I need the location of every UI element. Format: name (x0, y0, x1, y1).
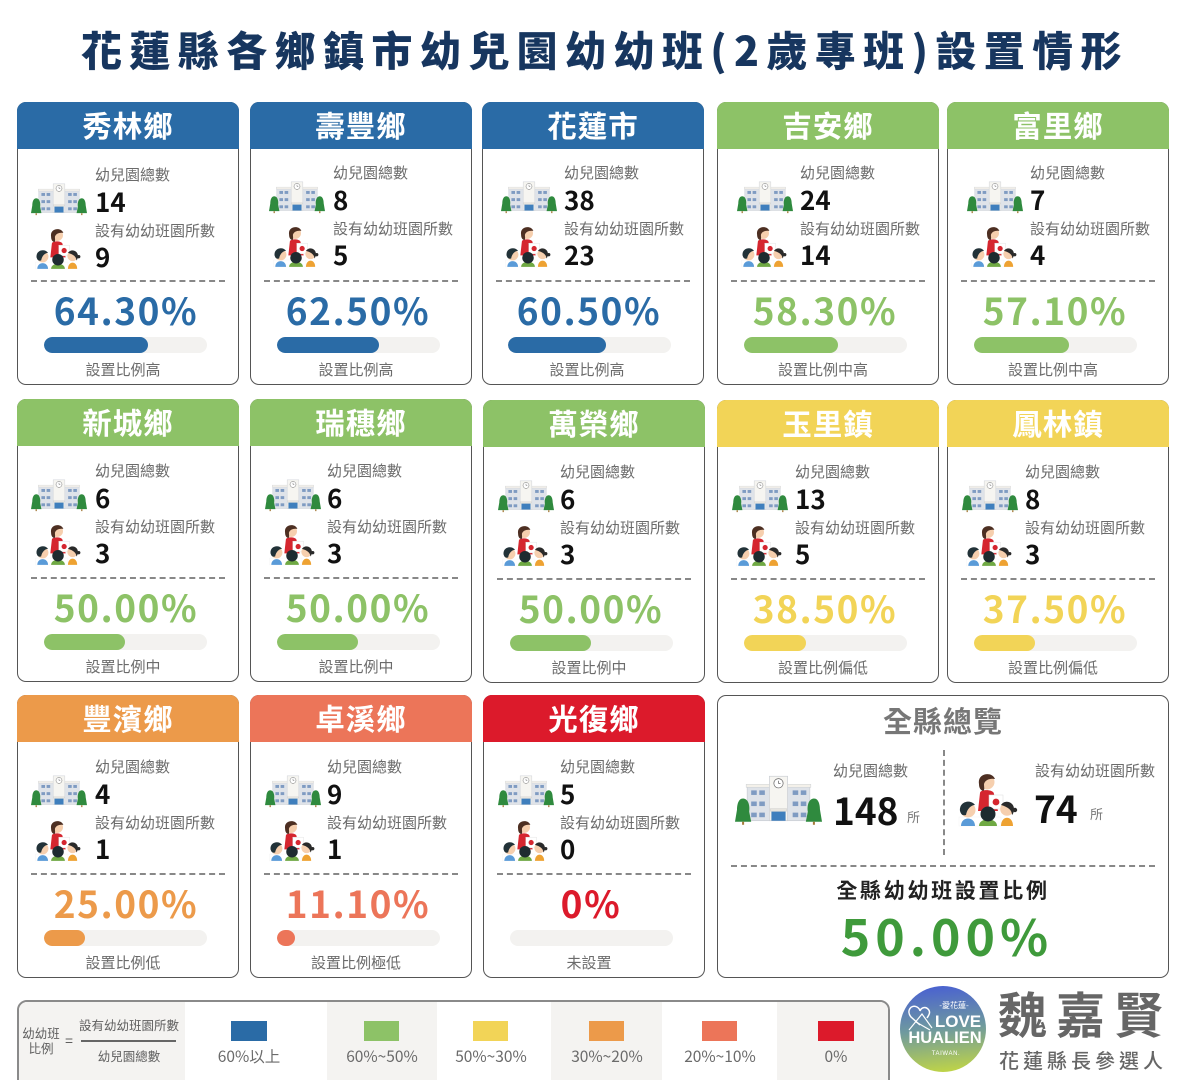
heading: 秀林鄉 (17, 102, 239, 149)
heading: 瑞穗鄉: 瑞穗鄉 (315, 401, 407, 443)
unit: 所 (1090, 804, 1103, 823)
formula: = (65, 1031, 73, 1051)
icon: teacher and children (742, 227, 786, 267)
icon: school (498, 776, 554, 808)
label: kindergarten total: 幼兒園總數 (1025, 461, 1100, 482)
label: kindergarten total: 幼兒園總數 (327, 756, 402, 777)
number: kindergarten total: 8 (1025, 480, 1040, 517)
panel: 吉安鄉 (717, 102, 939, 385)
label: with toddler class: 設有幼幼班園所數 (564, 218, 684, 239)
heading: 花蓮市: 花蓮市 (547, 104, 639, 146)
label: kindergarten total: 幼兒園總數 (95, 164, 170, 185)
label: kindergarten total: 幼兒園總數 (333, 162, 408, 183)
icon: teacher and children (736, 526, 782, 566)
formula (22, 1015, 179, 1065)
heading: county overview: 全縣總覽 (883, 699, 1003, 741)
icon: teacher and children (502, 821, 548, 861)
number: 74: 74 (1034, 780, 1078, 834)
label: with toddler class: 設有幼幼班園所數 (560, 517, 680, 538)
heading: 光復鄉: 光復鄉 (548, 697, 640, 739)
percentage: 37.50% (983, 580, 1127, 634)
logo: Love Hualien: -愛花蓮- (939, 1000, 969, 1011)
legend item: 30% to 20%: 30%~20% (571, 1045, 643, 1067)
caption: 設置比例高 (85, 359, 160, 380)
legend item: 0% (818, 1021, 854, 1067)
icon: school (737, 182, 793, 214)
legend item: 50% to 30% (455, 1021, 527, 1067)
logo: Love Hualien (900, 986, 986, 1072)
legend item: 60% to 50% (346, 1021, 418, 1067)
number: with toddler class: 3 (327, 534, 342, 571)
formula: 比例 (28, 1038, 54, 1057)
label: kindergarten total: 幼兒園總數 (800, 162, 875, 183)
logo: Love Hualien: LOVE (935, 1012, 981, 1031)
progress bar (277, 337, 440, 353)
percentage: 60.50% (517, 282, 661, 336)
label: with toddler class: 設有幼幼班園所數 (95, 516, 215, 537)
panel: 花蓮市 (482, 102, 704, 385)
caption: 設置比例中 (318, 656, 394, 677)
progress bar (510, 635, 673, 651)
icon: school (265, 776, 321, 808)
label: kindergarten total: 幼兒園總數 (560, 756, 635, 777)
progress bar (974, 337, 1137, 353)
label: with toddler class: 設有幼幼班園所數 (327, 516, 447, 537)
caption: 設置比例低 (85, 952, 160, 973)
heading: 富里鄉 (947, 102, 1169, 149)
percentage: 50.00% (519, 580, 663, 634)
icon: teacher and children (270, 821, 314, 861)
percentage: county ratio: 50.00% (841, 899, 1053, 971)
progress bar (974, 635, 1137, 651)
number: kindergarten total: 24 (800, 181, 831, 218)
label: with toddler class: 設有幼幼班園所數 (1035, 760, 1155, 781)
legend item: 20% to 10%: 20%~10% (684, 1045, 756, 1067)
number: kindergarten total: 9 (327, 775, 342, 812)
icon: teacher and children (966, 526, 1012, 566)
label: with toddler class: 設有幼幼班園所數 (800, 218, 920, 239)
number: with toddler class: 3 (560, 535, 575, 572)
label: kindergarten total: 幼兒園總數 (560, 461, 635, 482)
heading: 富里鄉: 富里鄉 (1012, 104, 1104, 146)
icon: school (501, 182, 557, 214)
heading: 光復鄉 (483, 695, 705, 742)
progress bar (44, 930, 207, 946)
progress bar (277, 930, 440, 946)
candidate name: 魏嘉賢 (998, 977, 1172, 1048)
caption: 設置比例高 (318, 359, 394, 380)
label: kindergarten total: 幼兒園總數 (95, 460, 170, 481)
formula: 幼兒園總數 (98, 1046, 160, 1065)
icon: school (31, 184, 87, 216)
panel: 瑞穗鄉 (250, 399, 472, 682)
panel: 鳳林鎮 (947, 400, 1169, 683)
number: kindergarten total: 13 (795, 480, 826, 517)
icon: school (732, 480, 788, 512)
progress bar (277, 634, 440, 650)
heading: 豐濱鄉 (17, 695, 239, 742)
caption: 設置比例偏低 (1008, 657, 1098, 678)
icon: teacher and children (36, 229, 80, 269)
formula: 幼幼班 (22, 1023, 60, 1042)
heading: 卓溪鄉: 卓溪鄉 (315, 697, 407, 739)
number: kindergarten total: 14 (95, 183, 126, 220)
number: kindergarten total: 7 (1030, 181, 1045, 218)
percentage: 50.00% (286, 579, 430, 633)
caption: 未設置 (566, 952, 612, 973)
percentage: 38.50% (753, 580, 897, 634)
legend item: 60% or more: 60%以上 (218, 1045, 280, 1067)
icon: school (265, 480, 321, 512)
title: 花蓮縣各鄉鎮市幼兒園幼幼班(2歲專班)設置情形 (81, 18, 1129, 78)
label: with toddler class: 設有幼幼班園所數 (327, 812, 447, 833)
heading: 壽豐鄉: 壽豐鄉 (315, 104, 407, 146)
formula: 設有幼幼班園所數 (79, 1015, 179, 1034)
number: kindergarten total: 5 (560, 775, 575, 812)
icon: teacher and children (959, 774, 1018, 826)
number: with toddler class: 4 (1030, 236, 1045, 273)
heading: 玉里鎮: 玉里鎮 (782, 402, 874, 444)
heading: 花蓮市 (482, 102, 704, 149)
percentage: 0% (561, 875, 621, 929)
panel: 卓溪鄉 (250, 695, 472, 978)
percentage: 62.50% (286, 282, 430, 336)
label: with toddler class: 設有幼幼班園所數 (1030, 218, 1150, 239)
panel: county overview (717, 695, 1169, 978)
number: kindergarten total: 6 (95, 479, 110, 516)
candidate title: 花蓮縣長參選人 (999, 1045, 1167, 1074)
number: with toddler class: 1 (327, 830, 342, 867)
caption: 設置比例中高 (1008, 359, 1098, 380)
number: kindergarten total: 4 (95, 775, 110, 812)
icon: school (269, 182, 325, 214)
number: 148: 148 (833, 782, 898, 836)
label: kindergarten total: 幼兒園總數 (327, 460, 402, 481)
legend (17, 1000, 890, 1080)
label: kindergarten total: 幼兒園總數 (564, 162, 639, 183)
caption: 設置比例極低 (311, 952, 401, 973)
number: with toddler class: 5 (795, 535, 810, 572)
heading: 吉安鄉 (717, 102, 939, 149)
icon: school (31, 776, 87, 808)
progress bar (44, 337, 207, 353)
progress bar (44, 634, 207, 650)
number: kindergarten total: 38 (564, 181, 595, 218)
percentage: 58.30% (753, 282, 897, 336)
number: kindergarten total: 6 (327, 479, 342, 516)
icon: teacher and children (36, 821, 80, 861)
caption: 設置比例中高 (778, 359, 868, 380)
heading: 新城鄉 (17, 399, 239, 446)
legend item: 20% to 10% (684, 1021, 756, 1067)
number: with toddler class: 23 (564, 236, 595, 273)
panel: 秀林鄉 (17, 102, 239, 385)
legend item: 30% to 20% (571, 1021, 643, 1067)
percentage: 11.10% (286, 875, 430, 929)
icon: teacher and children (972, 227, 1016, 267)
icon: school (31, 480, 87, 512)
number: with toddler class: 0 (560, 830, 575, 867)
heading: 鳳林鎮: 鳳林鎮 (1012, 402, 1104, 444)
progress bar (510, 930, 673, 946)
heading: 萬榮鄉: 萬榮鄉 (548, 402, 640, 444)
heading: 玉里鎮 (717, 400, 939, 447)
label: kindergarten total: 幼兒園總數 (833, 760, 908, 781)
legend item: 60% or more (218, 1021, 280, 1067)
heading: 新城鄉: 新城鄉 (82, 401, 174, 443)
percentage: 50.00% (54, 579, 198, 633)
heading: 卓溪鄉 (250, 695, 472, 742)
panel: 新城鄉 (17, 399, 239, 682)
icon: school (498, 480, 554, 512)
panel: 豐濱鄉 (17, 695, 239, 978)
icon: teacher and children (270, 525, 314, 565)
label: with toddler class: 設有幼幼班園所數 (95, 812, 215, 833)
icon: school (962, 480, 1018, 512)
percentage: 57.10% (983, 282, 1127, 336)
icon: teacher and children (506, 227, 550, 267)
panel: 萬榮鄉 (483, 400, 705, 683)
unit: 所 (907, 807, 920, 826)
label: kindergarten total: 幼兒園總數 (1030, 162, 1105, 183)
progress bar (744, 337, 907, 353)
label: with toddler class: 設有幼幼班園所數 (1025, 517, 1145, 538)
caption: 設置比例中 (551, 657, 626, 678)
logo: Love Hualien: HUALIEN (908, 1029, 982, 1047)
label: kindergarten total: 幼兒園總數 (95, 756, 170, 777)
progress bar (744, 635, 907, 651)
progress bar (508, 337, 671, 353)
number: with toddler class: 9 (95, 238, 110, 275)
heading: 瑞穗鄉 (250, 399, 472, 446)
legend item: 50% to 30%: 50%~30% (455, 1045, 527, 1067)
label: kindergarten total: 幼兒園總數 (795, 461, 870, 482)
heading: 壽豐鄉 (250, 102, 472, 149)
number: kindergarten total: 8 (333, 181, 348, 218)
percentage: 25.00% (54, 875, 198, 929)
heading: county ratio: 全縣幼幼班設置比例 (836, 875, 1050, 905)
heading: 秀林鄉: 秀林鄉 (82, 104, 174, 146)
icon: teacher and children (274, 227, 318, 267)
number: with toddler class: 1 (95, 830, 110, 867)
number: with toddler class: 3 (95, 534, 110, 571)
legend item: 0%: 0% (825, 1045, 847, 1067)
heading: 豐濱鄉: 豐濱鄉 (82, 697, 174, 739)
icon: teacher and children (502, 526, 548, 566)
number: with toddler class: 14 (800, 236, 831, 273)
label: with toddler class: 設有幼幼班園所數 (333, 218, 453, 239)
legend item: 60% to 50%: 60%~50% (346, 1045, 418, 1067)
icon: teacher and children (36, 525, 80, 565)
label: with toddler class: 設有幼幼班園所數 (795, 517, 915, 538)
number: with toddler class: 3 (1025, 535, 1040, 572)
icon: school (967, 182, 1023, 214)
panel: 玉里鎮 (717, 400, 939, 683)
heading: 鳳林鎮 (947, 400, 1169, 447)
caption: 設置比例偏低 (778, 657, 868, 678)
logo: Love Hualien: TAIWAN. (932, 1051, 960, 1057)
icon: school (735, 776, 822, 825)
number: with toddler class: 5 (333, 236, 348, 273)
caption: 設置比例高 (549, 359, 624, 380)
panel: 富里鄉 (947, 102, 1169, 385)
label: with toddler class: 設有幼幼班園所數 (95, 220, 215, 241)
caption: 設置比例中 (85, 656, 160, 677)
heading: 萬榮鄉 (483, 400, 705, 447)
label: with toddler class: 設有幼幼班園所數 (560, 812, 680, 833)
percentage: 64.30% (54, 282, 198, 336)
panel: 壽豐鄉 (250, 102, 472, 385)
number: kindergarten total: 6 (560, 480, 575, 517)
heading: 吉安鄉: 吉安鄉 (782, 104, 874, 146)
panel: 光復鄉 (483, 695, 705, 978)
